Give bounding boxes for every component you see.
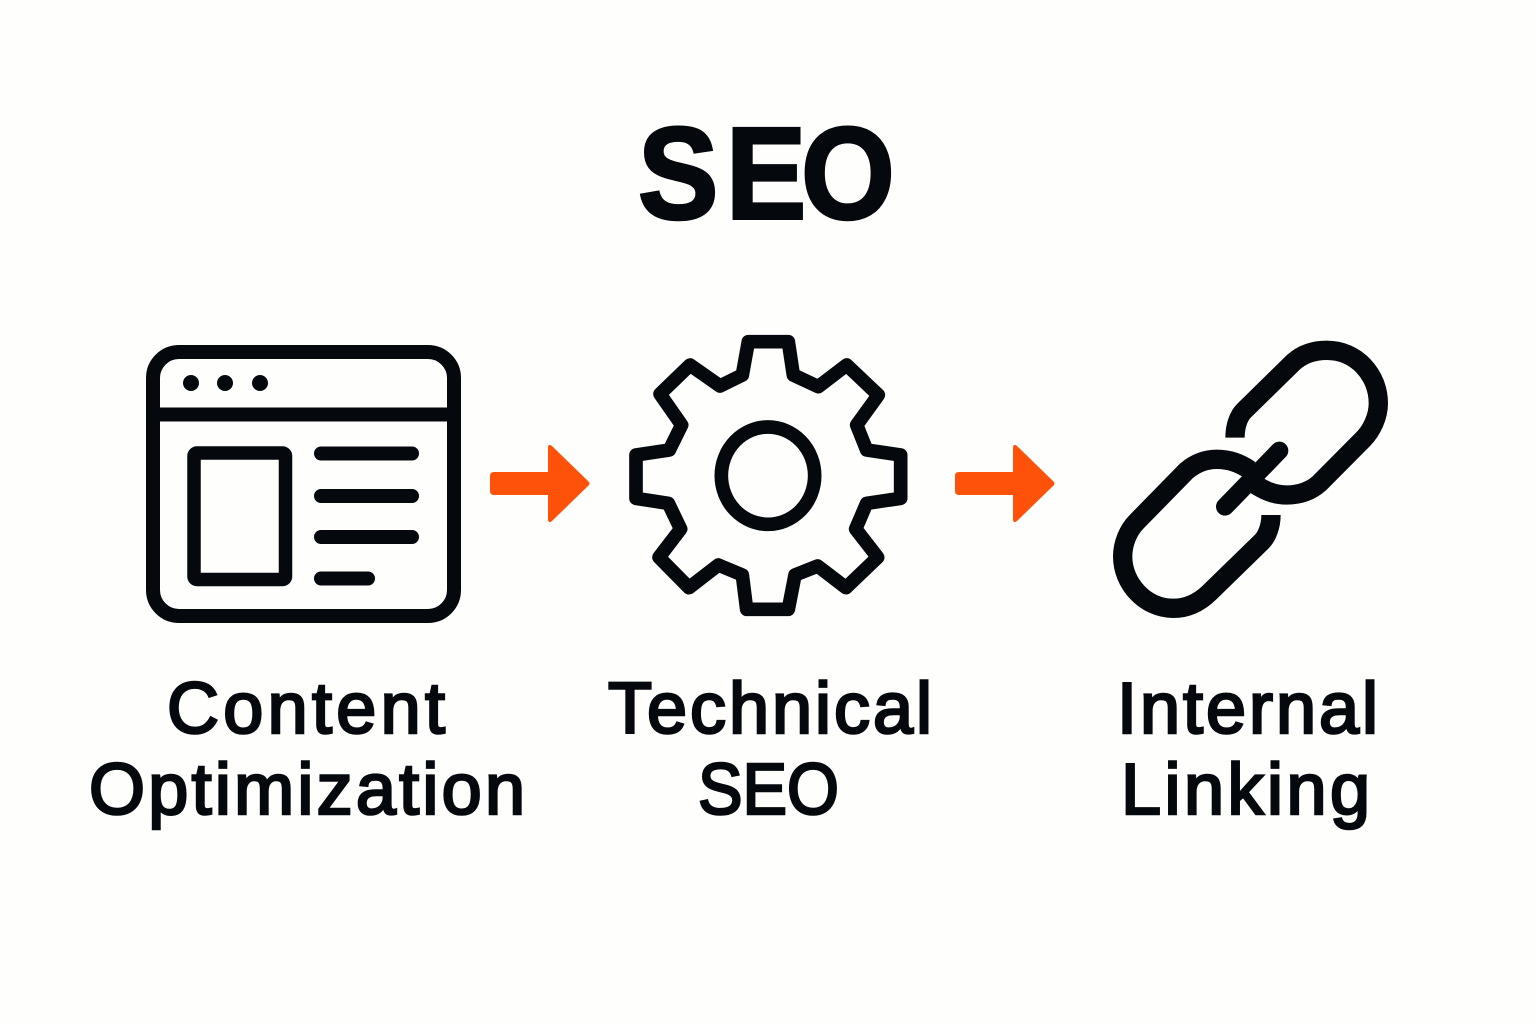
- upper link: [1235, 350, 1378, 495]
- browser dots: [183, 375, 268, 391]
- label: technical seo: [608, 669, 932, 830]
- browser header divider: [153, 408, 454, 422]
- browser frame: [153, 352, 454, 616]
- icon: browser window with content: [153, 352, 454, 616]
- label: technical seo: SEO: [698, 750, 839, 830]
- label: technical seo: Technical: [608, 669, 932, 749]
- arrow: content to technical: [490, 445, 590, 522]
- label: content optimization: Optimization: [89, 750, 525, 830]
- gear hub: [721, 427, 815, 524]
- label: internal linking: Linking: [1121, 750, 1370, 830]
- icon: gear: [636, 342, 901, 609]
- image placeholder: [194, 453, 286, 580]
- title: SEO: [638, 100, 895, 247]
- label: content optimization: Content: [167, 669, 445, 749]
- label: content optimization: [89, 669, 525, 830]
- connecting bar: [1225, 451, 1279, 507]
- label: internal linking: [1117, 669, 1378, 830]
- lower link: [1123, 459, 1271, 608]
- gear outline: [636, 342, 901, 609]
- icon: chain link: [1123, 350, 1378, 608]
- label: internal linking: Internal: [1117, 669, 1378, 749]
- text lines: [321, 454, 412, 578]
- arrow: technical to linking: [955, 445, 1054, 522]
